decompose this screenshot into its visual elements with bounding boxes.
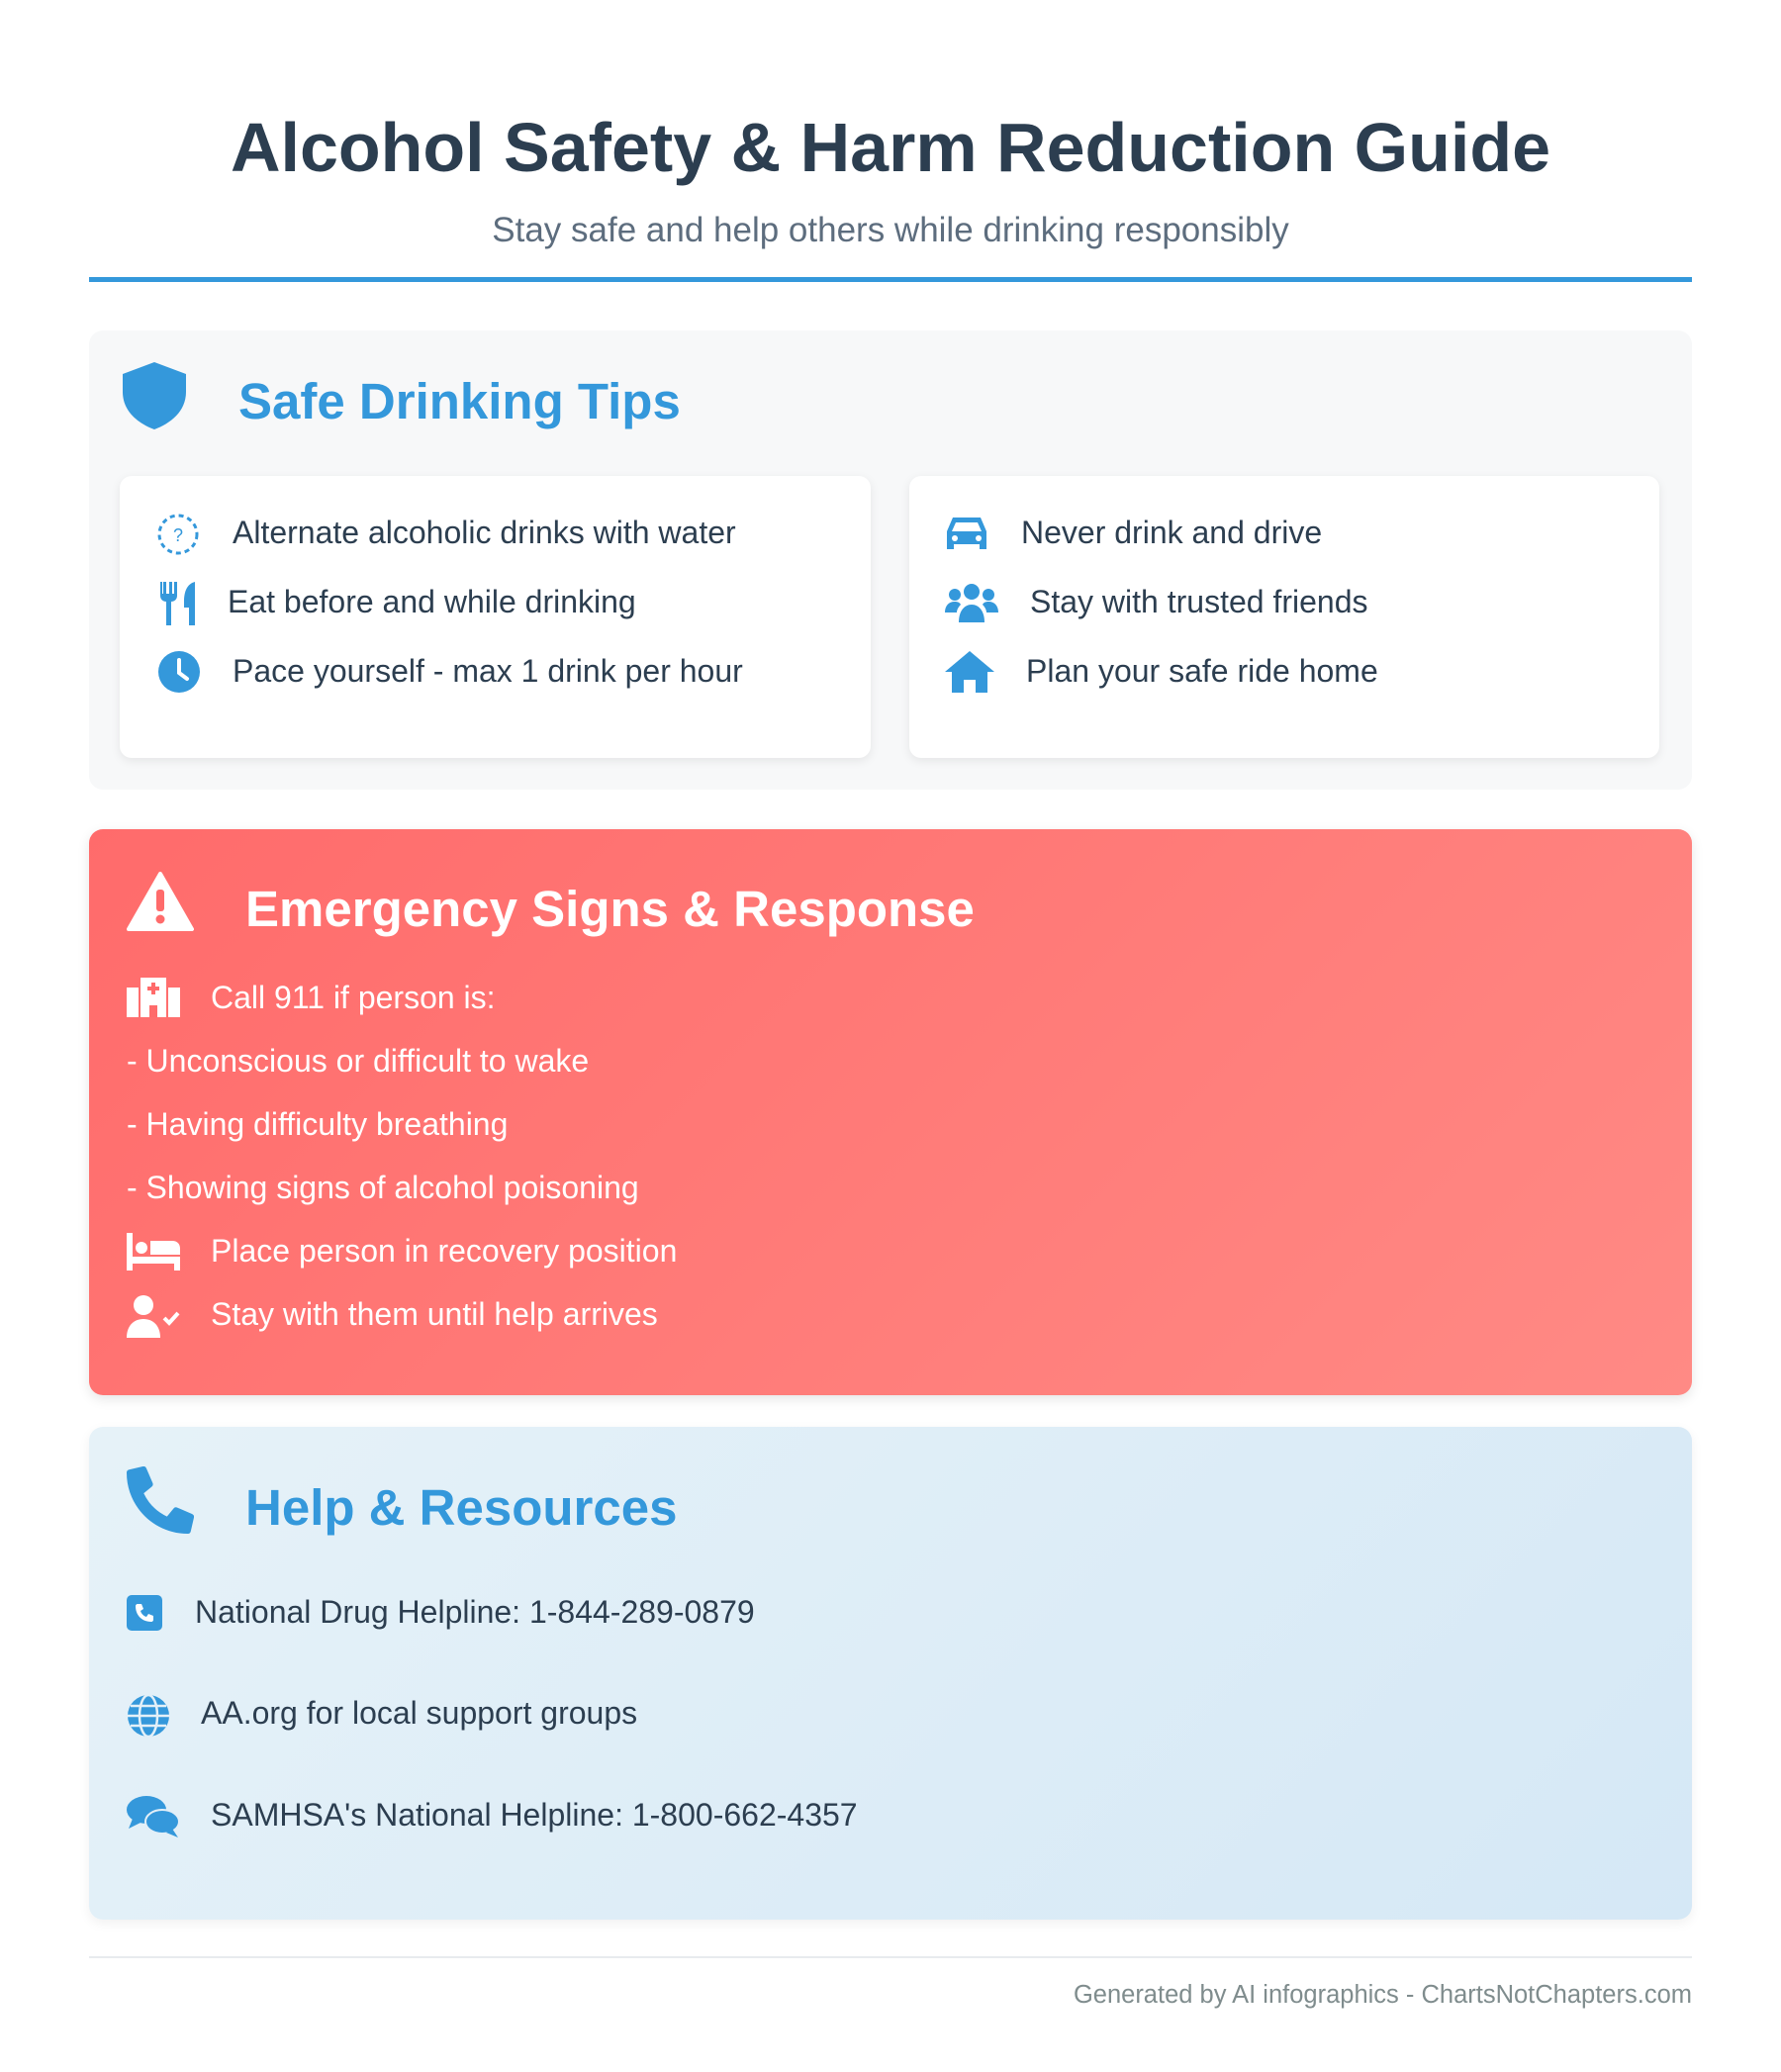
icon: car xyxy=(947,518,986,549)
footer: Generated by AI infographics - ChartsNotChapters.com xyxy=(1074,1981,1692,2009)
tip: Stay with trusted friends xyxy=(1030,584,1367,619)
tip: Plan your safe ride home xyxy=(1026,653,1378,689)
tip: Alternate alcoholic drinks with water xyxy=(233,515,736,550)
item: Place person in recovery position xyxy=(211,1233,677,1269)
icon: bed xyxy=(127,1233,180,1271)
item: - Showing signs of alcohol poisoning xyxy=(127,1170,639,1205)
item: - Having difficulty breathing xyxy=(127,1106,508,1142)
panel: emergency xyxy=(89,829,1692,1395)
resource: AA.org for local support groups xyxy=(201,1695,637,1731)
panel: help & resources xyxy=(89,1427,1692,1920)
heading: Emergency Signs & Response xyxy=(245,881,975,937)
card: left tips xyxy=(120,476,871,758)
icon: phone square xyxy=(127,1595,162,1631)
resource: National Drug Helpline: 1-844-289-0879 xyxy=(195,1594,755,1630)
icon: phone xyxy=(127,1466,194,1534)
title: Alcohol Safety & Harm Reduction Guide xyxy=(231,109,1550,186)
tip: Eat before and while drinking xyxy=(228,584,636,619)
icon: water xyxy=(158,515,198,554)
icon: shield xyxy=(123,362,186,429)
icon: utensils xyxy=(160,582,195,625)
icon: warning xyxy=(127,872,194,931)
tip: Never drink and drive xyxy=(1021,515,1322,550)
card: right tips xyxy=(909,476,1659,758)
icon: clock xyxy=(158,651,200,693)
item: Call 911 if person is: xyxy=(211,980,496,1015)
heading: Help & Resources xyxy=(245,1479,677,1536)
subtitle: Stay safe and help others while drinking responsibly xyxy=(492,211,1289,249)
icon: hospital xyxy=(127,978,180,1017)
panel: safe drinking tips xyxy=(89,330,1692,790)
icon: user check xyxy=(127,1295,180,1338)
icon: chat xyxy=(127,1796,178,1837)
icon: house xyxy=(945,651,994,693)
item: - Unconscious or difficult to wake xyxy=(127,1043,589,1079)
tip: Pace yourself - max 1 drink per hour xyxy=(233,653,743,689)
icon: globe xyxy=(128,1695,169,1736)
icon: water: ? xyxy=(173,525,183,545)
item: Stay with them until help arrives xyxy=(211,1296,658,1332)
resource: SAMHSA's National Helpline: 1-800-662-4357 xyxy=(211,1797,858,1833)
heading: Safe Drinking Tips xyxy=(238,373,681,429)
icon: friends xyxy=(945,584,998,622)
